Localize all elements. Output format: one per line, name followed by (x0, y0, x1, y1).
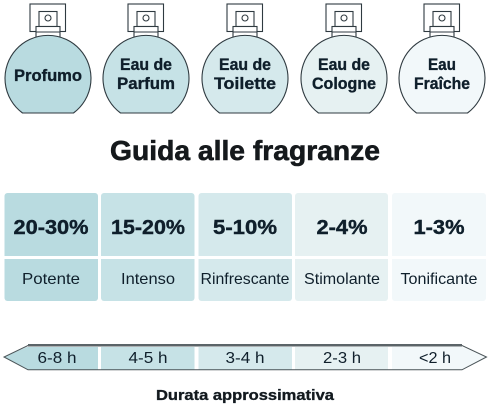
bottle: Eau de Parfum: Parfum (117, 75, 175, 93)
column: Eau de Parfum concentration (101, 193, 194, 301)
column: Eau de Cologne concentration: Stimolante (304, 271, 380, 288)
column: Eau de Parfum concentration: Intenso (121, 271, 175, 288)
column: Eau Fraîche concentration: Tonificante (400, 271, 478, 288)
column: Profumo concentration: 20-30% (14, 217, 89, 239)
column: Eau de Toilette concentration (198, 193, 292, 301)
bottle: Eau de Toilette: Eau de (219, 56, 271, 74)
column: Eau de Cologne concentration (295, 193, 388, 301)
duration arrow: 3-4 h (226, 350, 264, 367)
column: Eau de Toilette concentration: Rinfrescante (200, 271, 290, 288)
bottle: Eau de Parfum: Eau de (120, 56, 172, 74)
bottle: Eau de Toilette: Toilette (214, 75, 276, 93)
title: Guida alle fragranze (110, 135, 380, 166)
column: Profumo concentration (4, 193, 98, 301)
axis caption: Durata approssimativa (156, 387, 335, 404)
bottle: Profumo (5, 4, 91, 113)
column: Profumo concentration: Potente (22, 271, 80, 288)
bottle: Eau Fraîche: Eau (428, 56, 456, 74)
bottle: Eau Fraîche: Fraîche (414, 75, 470, 93)
column: Eau de Toilette concentration: 5-10% (213, 217, 277, 239)
bottle: Eau de Cologne: Eau de (318, 56, 370, 74)
bottle: Eau de Toilette (202, 4, 288, 113)
duration arrow: <2 h (419, 350, 451, 367)
duration arrow: 2-3 h (323, 350, 361, 367)
column: Eau de Cologne concentration: 2-4% (316, 217, 368, 239)
bottle: Profumo: Profumo (14, 67, 82, 85)
duration arrow (4, 345, 486, 370)
column: Eau Fraîche concentration (392, 193, 486, 301)
column: Eau Fraîche concentration: 1-3% (414, 217, 465, 239)
duration arrow: 4-5 h (128, 350, 168, 367)
bottle: Eau de Cologne (301, 4, 387, 113)
bottle: Eau de Cologne: Cologne (312, 75, 376, 93)
duration arrow: 6-8 h (38, 350, 76, 367)
bottle: Eau de Parfum (103, 4, 189, 113)
column: Eau de Parfum concentration: 15-20% (111, 217, 185, 239)
bottle: Eau Fraîche (399, 4, 485, 113)
